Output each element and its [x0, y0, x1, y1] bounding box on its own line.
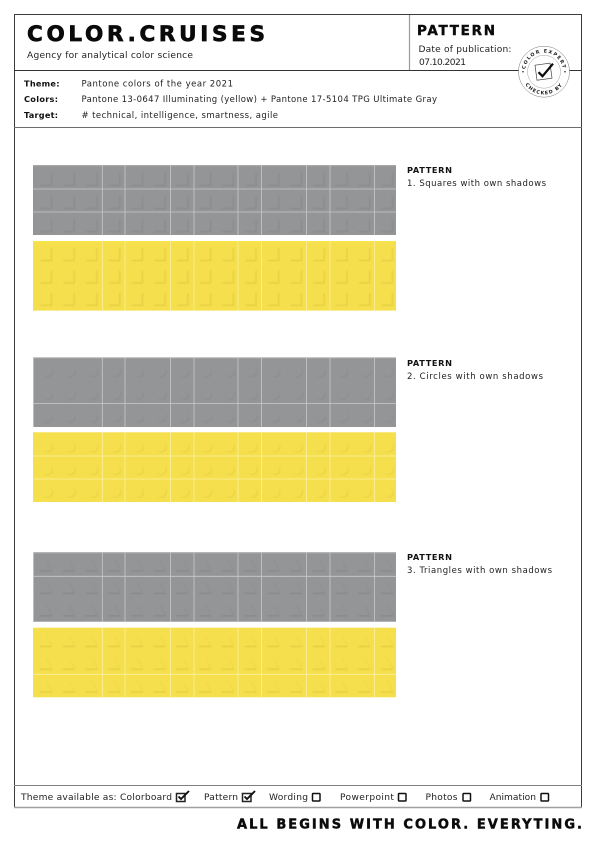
row: target: # technical, intelligence, smartness, agile [82, 111, 278, 121]
label: squares pattern: PATTERN [407, 165, 452, 175]
label: circles pattern: PATTERN [407, 358, 452, 368]
theme details [24, 78, 437, 121]
unavailable: animation: Animation [490, 793, 536, 803]
publication date: 07.10.2021 [419, 58, 466, 68]
row: target: Target: [24, 110, 58, 120]
label: triangles pattern [407, 552, 553, 576]
header: brand [27, 22, 265, 61]
icon: color expert stamp [518, 46, 570, 98]
tagline: Agency for analytical color science [27, 51, 193, 61]
panel: yellow triangles [33, 628, 396, 697]
icon: color expert stamp: COLOR EXPERT [522, 49, 566, 69]
panel: yellow circles [33, 432, 396, 502]
label: triangles pattern: PATTERN [407, 552, 452, 562]
unavailable: wording: Wording [269, 793, 308, 803]
available: pattern [204, 791, 255, 803]
row: theme [24, 78, 233, 89]
publication date [418, 45, 512, 68]
panel: gray circles [33, 357, 396, 427]
label: circles pattern: 2. Circles with own shadows [407, 372, 544, 382]
row: colors: Pantone 13-0647 Illuminating (yellow) + Pantone 17-5104 TPG Ultimate Gray [82, 95, 437, 105]
panel: yellow squares [33, 240, 396, 311]
slogan: ALL BEGINS WITH COLOR. EVERYTING. [237, 817, 582, 832]
unavailable: photos: Photos [426, 793, 458, 803]
label: squares pattern [407, 165, 547, 189]
label: circles pattern [407, 358, 544, 382]
publication date: Date of publication: [418, 45, 512, 55]
icon: color expert stamp: CHECKED BY [526, 83, 562, 94]
label: squares pattern: 1. Squares with own shadows [407, 179, 547, 189]
row: colors: Colors: [24, 94, 58, 104]
heading: pattern: PATTERN [417, 23, 495, 39]
available: colorboard: Theme available as: Colorboard [20, 793, 172, 803]
available: pattern: Pattern [204, 793, 238, 803]
footer: theme availability [20, 791, 548, 803]
panel: gray triangles [33, 552, 396, 622]
title: COLOR.CRUISES [27, 22, 265, 47]
panel: gray squares [33, 165, 396, 235]
label: triangles pattern: 3. Triangles with own shadows [407, 566, 553, 576]
row: theme: Theme: [24, 78, 60, 88]
header: document type [417, 23, 512, 68]
unavailable: powerpoint: Powerpoint [340, 793, 394, 803]
row: theme: Pantone colors of the year 2021 [82, 79, 233, 89]
